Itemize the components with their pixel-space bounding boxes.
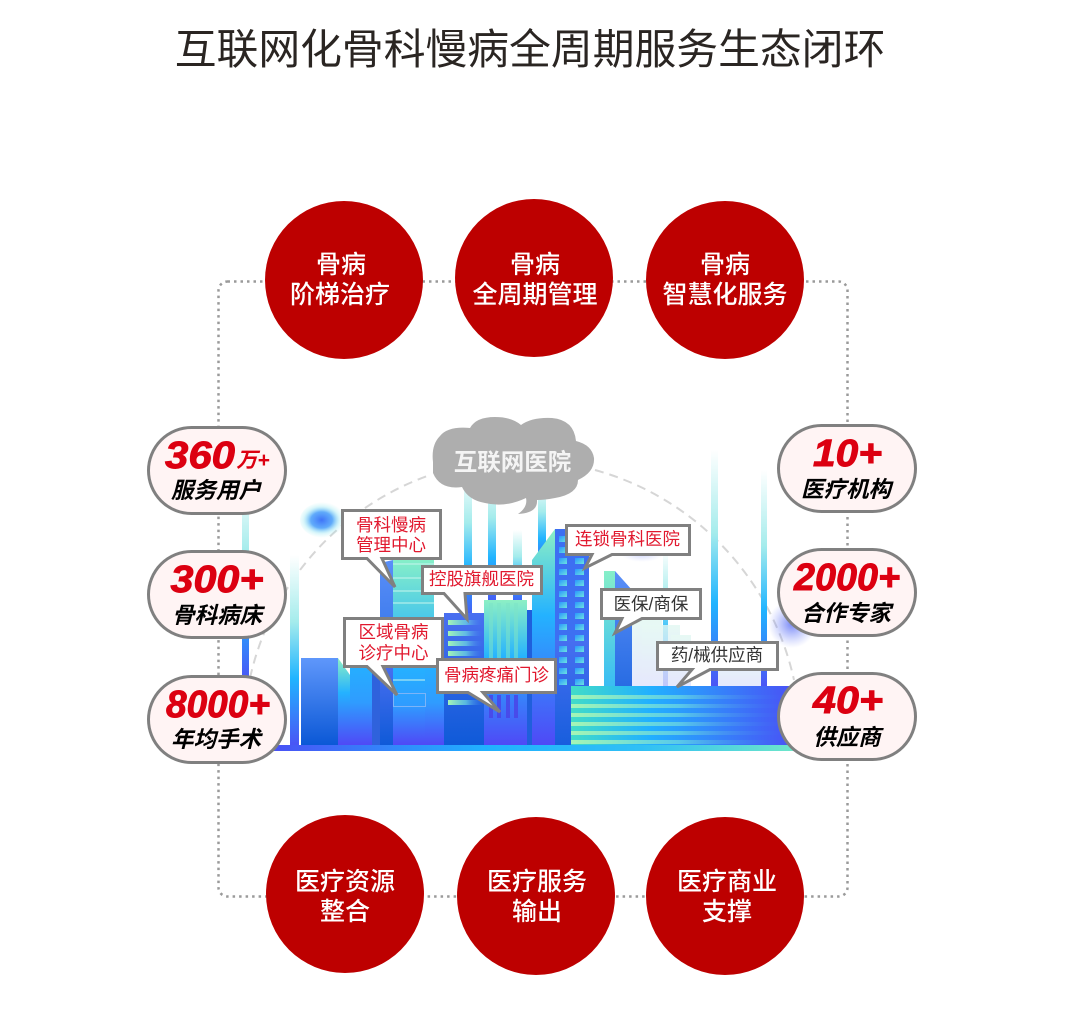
callout: 医保/商保 bbox=[602, 590, 700, 633]
building: wide base block bbox=[571, 686, 796, 745]
dotted frame bbox=[218, 282, 848, 896]
circle: 骨病智慧化服务: 智慧化服务 bbox=[662, 281, 788, 309]
circle: 骨病智慧化服务: 骨病 bbox=[700, 251, 750, 279]
stat bubble: 360万+ 服务用户: 万+ bbox=[236, 449, 270, 472]
callout: 医保/商保: 医保/商保 bbox=[614, 594, 689, 614]
cloud: 互联网医院 bbox=[433, 417, 594, 514]
circle: 医疗资源整合: 整合 bbox=[320, 898, 370, 926]
building: vertical stripes bbox=[484, 600, 532, 745]
stat bubble: 360万+ 服务用户: 服务用户 bbox=[171, 478, 262, 503]
building: striped block bbox=[444, 613, 484, 745]
circle: 医疗商业支撑: 医疗商业 bbox=[677, 868, 777, 896]
ground strip bbox=[270, 745, 800, 751]
stat bubble: 2000+ 合作专家 bbox=[778, 550, 916, 636]
building: tall tower with lines bbox=[372, 560, 444, 745]
circle: 骨病阶梯治疗: 骨病 bbox=[316, 251, 366, 279]
callout: 骨病疼痛门诊 bbox=[438, 660, 556, 712]
circle: 医疗服务输出: 输出 bbox=[512, 898, 562, 926]
faded background buildings bbox=[632, 620, 761, 686]
circle: 骨病全周期管理: 全周期管理 bbox=[472, 281, 598, 309]
blue glow orbs bbox=[300, 502, 816, 648]
stat bubble: 10+ 医疗机构: 医疗机构 bbox=[801, 477, 894, 502]
stat bubble: 40+ 供应商 bbox=[778, 674, 916, 760]
stat bubble: 300+ 骨科病床 bbox=[148, 552, 286, 638]
stat bubble: 40+ 供应商: 40+ bbox=[812, 680, 883, 722]
callout: 控股旗舰医院 bbox=[422, 566, 542, 619]
dashed arc bbox=[250, 470, 794, 680]
circle: 医疗服务输出: 医疗服务 bbox=[487, 868, 587, 896]
stat bubble: 2000+ 合作专家: 合作专家 bbox=[801, 601, 894, 626]
circle: 骨病全周期管理 bbox=[455, 199, 613, 357]
stat bubble: 300+ 骨科病床: 300+ bbox=[170, 559, 264, 601]
callout: 控股旗舰医院: 控股旗舰医院 bbox=[429, 569, 534, 589]
callout: 骨科慢病管理中心 bbox=[342, 510, 440, 587]
stat bubble: 360万+ 服务用户: 360 bbox=[165, 435, 235, 477]
stat bubble: 2000+ 合作专家: 2000+ bbox=[793, 557, 900, 599]
stat bubble: 8000+ 年均手术: 年均手术 bbox=[171, 727, 263, 752]
stat bubble: 10+ 医疗机构: 10+ bbox=[813, 433, 882, 475]
building: tall windowed tower bbox=[532, 529, 589, 745]
callout: 骨科慢病管理中心: 骨科慢病 bbox=[356, 515, 426, 535]
building: narrow tower right bbox=[604, 571, 632, 745]
callout: 区域骨病诊疗中心: 诊疗中心 bbox=[358, 643, 428, 663]
circle: 医疗服务输出 bbox=[457, 817, 615, 975]
callout: 区域骨病诊疗中心 bbox=[344, 618, 442, 695]
stat bubble: 360万+ 服务用户 bbox=[148, 428, 286, 514]
stat bubble: 300+ 骨科病床: 骨科病床 bbox=[172, 603, 265, 628]
circle: 医疗商业支撑 bbox=[646, 817, 804, 975]
circle: 医疗资源整合 bbox=[266, 815, 424, 973]
circle: 医疗资源整合: 医疗资源 bbox=[295, 868, 395, 896]
callout: 药/械供应商 bbox=[658, 642, 778, 687]
circle: 骨病阶梯治疗 bbox=[265, 201, 423, 359]
stat bubble: 10+ 医疗机构 bbox=[778, 426, 916, 512]
stat bubble: 40+ 供应商: 供应商 bbox=[813, 725, 884, 750]
cloud: 互联网医院: 互联网医院 bbox=[454, 443, 571, 477]
callout: 区域骨病诊疗中心: 区域骨病 bbox=[358, 622, 428, 642]
stat bubble: 8000+ 年均手术: 8000+ bbox=[166, 684, 270, 726]
circle: 医疗商业支撑: 支撑 bbox=[702, 898, 752, 926]
callout: 骨病疼痛门诊: 骨病疼痛门诊 bbox=[444, 665, 549, 685]
stat bubble: 8000+ 年均手术 bbox=[148, 676, 286, 762]
circle: 骨病智慧化服务 bbox=[646, 201, 804, 359]
city illustration bbox=[242, 450, 816, 751]
building: low block left bbox=[301, 658, 380, 745]
title: 互联网化骨科慢病全周期服务生态闭环 bbox=[175, 17, 885, 77]
callout: 连锁骨科医院: 连锁骨科医院 bbox=[575, 529, 680, 549]
callout: 连锁骨科医院 bbox=[566, 526, 690, 568]
light bars bbox=[242, 450, 767, 745]
callout: 骨科慢病管理中心: 管理中心 bbox=[356, 535, 426, 555]
callout: 药/械供应商: 药/械供应商 bbox=[671, 645, 763, 665]
circle: 骨病全周期管理: 骨病 bbox=[510, 251, 560, 279]
circle: 骨病阶梯治疗: 阶梯治疗 bbox=[290, 281, 390, 309]
